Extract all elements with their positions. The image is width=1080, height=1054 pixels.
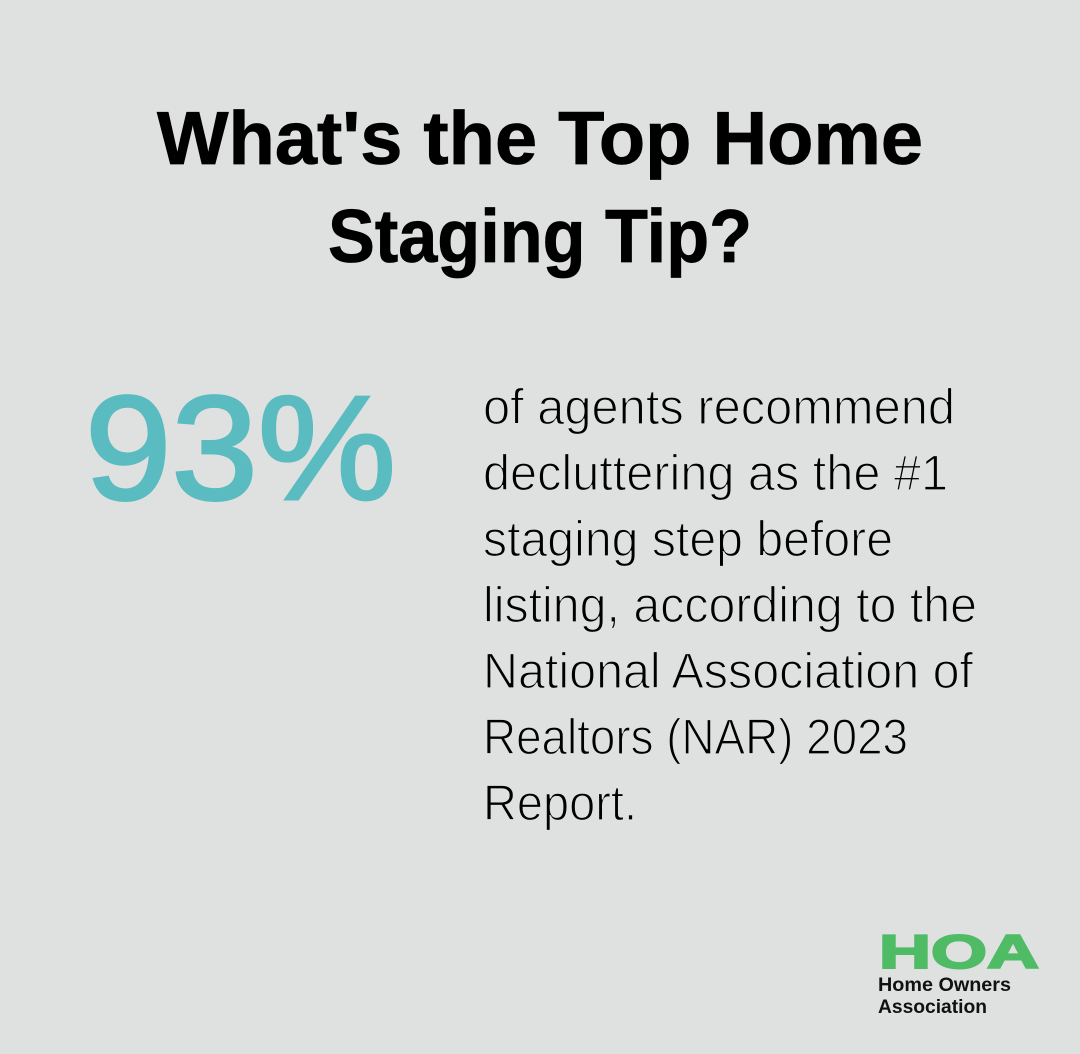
description text: Realtors (NAR) 2023 [483, 709, 908, 765]
description text: decluttering as the #1 [483, 445, 948, 501]
description text: listing, according to the [483, 577, 977, 633]
title: What's the Top Home [157, 96, 923, 180]
logo name: Association [878, 997, 987, 1018]
description text: Report. [483, 775, 637, 831]
logo name [878, 975, 1011, 1018]
logo wordmark: HOA [879, 925, 1039, 978]
logo name: Home Owners [878, 975, 1011, 996]
title: Staging Tip? [328, 194, 752, 278]
description text [483, 379, 977, 831]
description text: staging step before [483, 511, 893, 567]
title [157, 96, 923, 278]
big statistic: 93%: 93% [85, 366, 396, 531]
description text: National Association of [483, 643, 973, 699]
description text: of agents recommend [483, 379, 955, 435]
logo: HOA Home Owners Association [878, 925, 1039, 1018]
